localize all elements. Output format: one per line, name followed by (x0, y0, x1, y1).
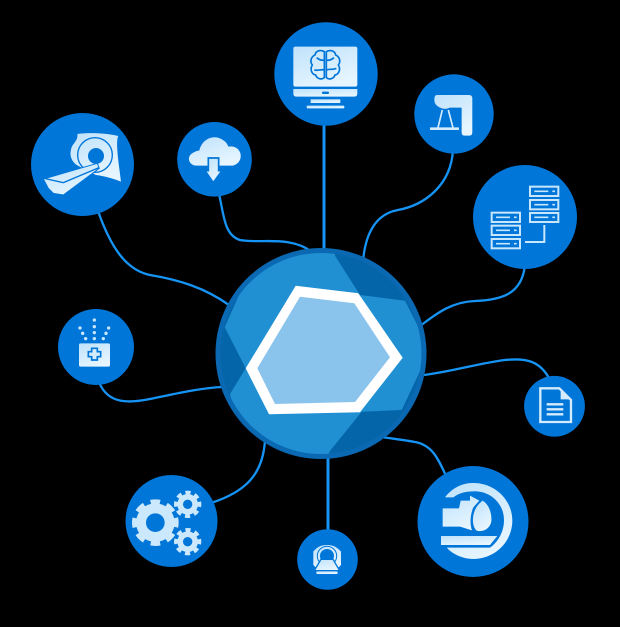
icon: server racks (492, 187, 558, 248)
icon: monitor with brain (293, 47, 357, 108)
node: small scanner (297, 529, 358, 590)
icon: medical box with dots (78, 318, 110, 367)
icon: document (540, 388, 571, 422)
icon: MRI scanner (441, 483, 512, 559)
node: brain on monitor (274, 22, 378, 126)
icon: cloud with arrow (189, 137, 241, 183)
central hub (216, 248, 426, 459)
icon: gears (130, 490, 202, 556)
node: gears (126, 475, 218, 567)
node: medical kit (58, 309, 134, 385)
node: robotic arm (414, 74, 494, 154)
node: scanner with leaf (418, 466, 528, 577)
node: cloud download (177, 122, 252, 197)
connector lines (98, 122, 550, 532)
icon: x-ray arm (430, 95, 472, 136)
icon: CT scanner (43, 133, 121, 195)
icon: scanner (313, 545, 341, 574)
node: servers (473, 165, 577, 269)
node: document (524, 376, 585, 437)
node: CT scanner (31, 113, 134, 216)
hexagon logo (246, 286, 403, 414)
